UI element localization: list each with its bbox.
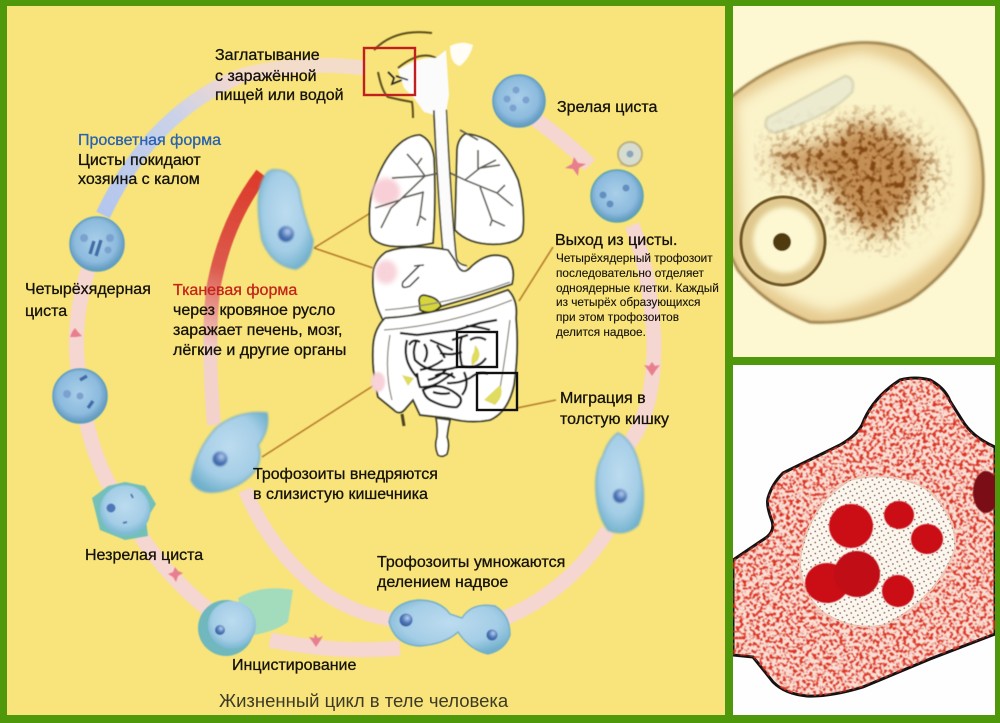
connector lines [262,212,556,457]
large intestine [373,290,517,422]
transverse colon fold [384,282,512,400]
label: excystation description: Четырёхядерный трофозоит [556,251,713,265]
inner tissue ring [210,174,395,620]
left lung [369,135,435,247]
colon infection spot [371,372,385,392]
label: excystation heading: Выход из цисты. [555,232,677,249]
icon: trophozoite migrating [596,433,643,533]
label: mucosa: Трофозоиты внедряются [253,466,438,483]
icon: excysting cell [591,142,643,222]
liver infection spot [375,260,397,284]
label: immature cyst: Незрелая циста [85,547,203,564]
stomach and liver [373,247,513,322]
yellow gaps in intestine [402,345,502,405]
cell cytoplasm [736,52,974,312]
pharynx [398,50,449,118]
bronchi [375,130,513,228]
label: luminal form: Цисты покидают [78,152,201,169]
head outline [374,32,436,118]
icon: immature cyst [92,482,156,540]
label: migration: толстую кишку [560,411,669,428]
dark inclusion [973,471,999,513]
right lung [455,134,523,244]
cycle arrows [70,157,660,647]
label: division: делением надвое [377,574,508,591]
label: swallowing: Заглатывание [215,47,320,64]
icon: binucleate cyst [53,369,107,423]
cell body [733,378,995,696]
outer cycle ring [76,65,654,650]
label: excystation description: при этом трофозоитов [556,310,679,324]
nuclear area [800,476,955,627]
label: encystment: Инцистирование [232,657,356,674]
icon: dividing trophozoites [389,600,510,654]
label: four-nucleus cyst: Четырёхядерная [25,281,151,298]
esophagus [440,110,466,272]
rectum [436,418,450,456]
nucleus [741,197,825,285]
label: excystation description: из четырёх образующихся [556,295,700,309]
granular cytoplasm [733,375,995,700]
lung infection spot [372,178,400,206]
pale vacuole [766,76,853,133]
cell body [728,43,983,322]
small intestine [400,320,497,407]
icon: trophozoite in mucosa [191,413,268,492]
highlight boxes [364,48,517,410]
brown granules [775,124,925,235]
label: tissue form: заражает печень, мозг, [173,322,342,339]
label: four-nucleus cyst: циста [25,303,67,320]
salivary gland [450,43,473,66]
icon: mature cyst [493,75,545,127]
label: division: Трофозоиты умножаются [377,554,565,571]
label: mucosa: в слизистую кишечника [253,486,428,503]
red karyosomes [805,501,943,607]
caption: Жизненный цикл в теле человека [219,690,509,711]
panel: trophozoite drawing [733,365,999,715]
label: mature cyst: Зрелая циста [557,99,658,116]
gallbladder [402,265,424,287]
icon: tissue trophozoite [258,170,313,269]
panel: cyst micrograph [728,6,995,357]
brown mottling [770,117,938,245]
icon: digestive system and lungs [369,32,523,456]
label: tissue form: через кровяное русло [173,302,335,319]
label: luminal form: Просветная форма [78,132,221,149]
label: tissue form: Тканевая форма [173,282,297,299]
label: excystation description: делится надвое. [556,325,646,339]
appendix [402,414,404,426]
label: swallowing: с заражённой [215,68,317,85]
label: excystation description: последовательно отделяет [556,266,705,280]
icon: encysting cell [198,588,293,656]
label: migration: Миграция в [560,390,646,407]
panel: life cycle [7,6,725,715]
label: tissue form: лёгкие и другие органы [173,342,346,359]
label: excystation description: одноядерные клетки. Каждый [556,281,719,295]
label: swallowing: пищей или водой [215,87,344,104]
label: luminal form: хозяина с калом [78,171,200,188]
icon: four-nucleus cyst [70,217,124,271]
